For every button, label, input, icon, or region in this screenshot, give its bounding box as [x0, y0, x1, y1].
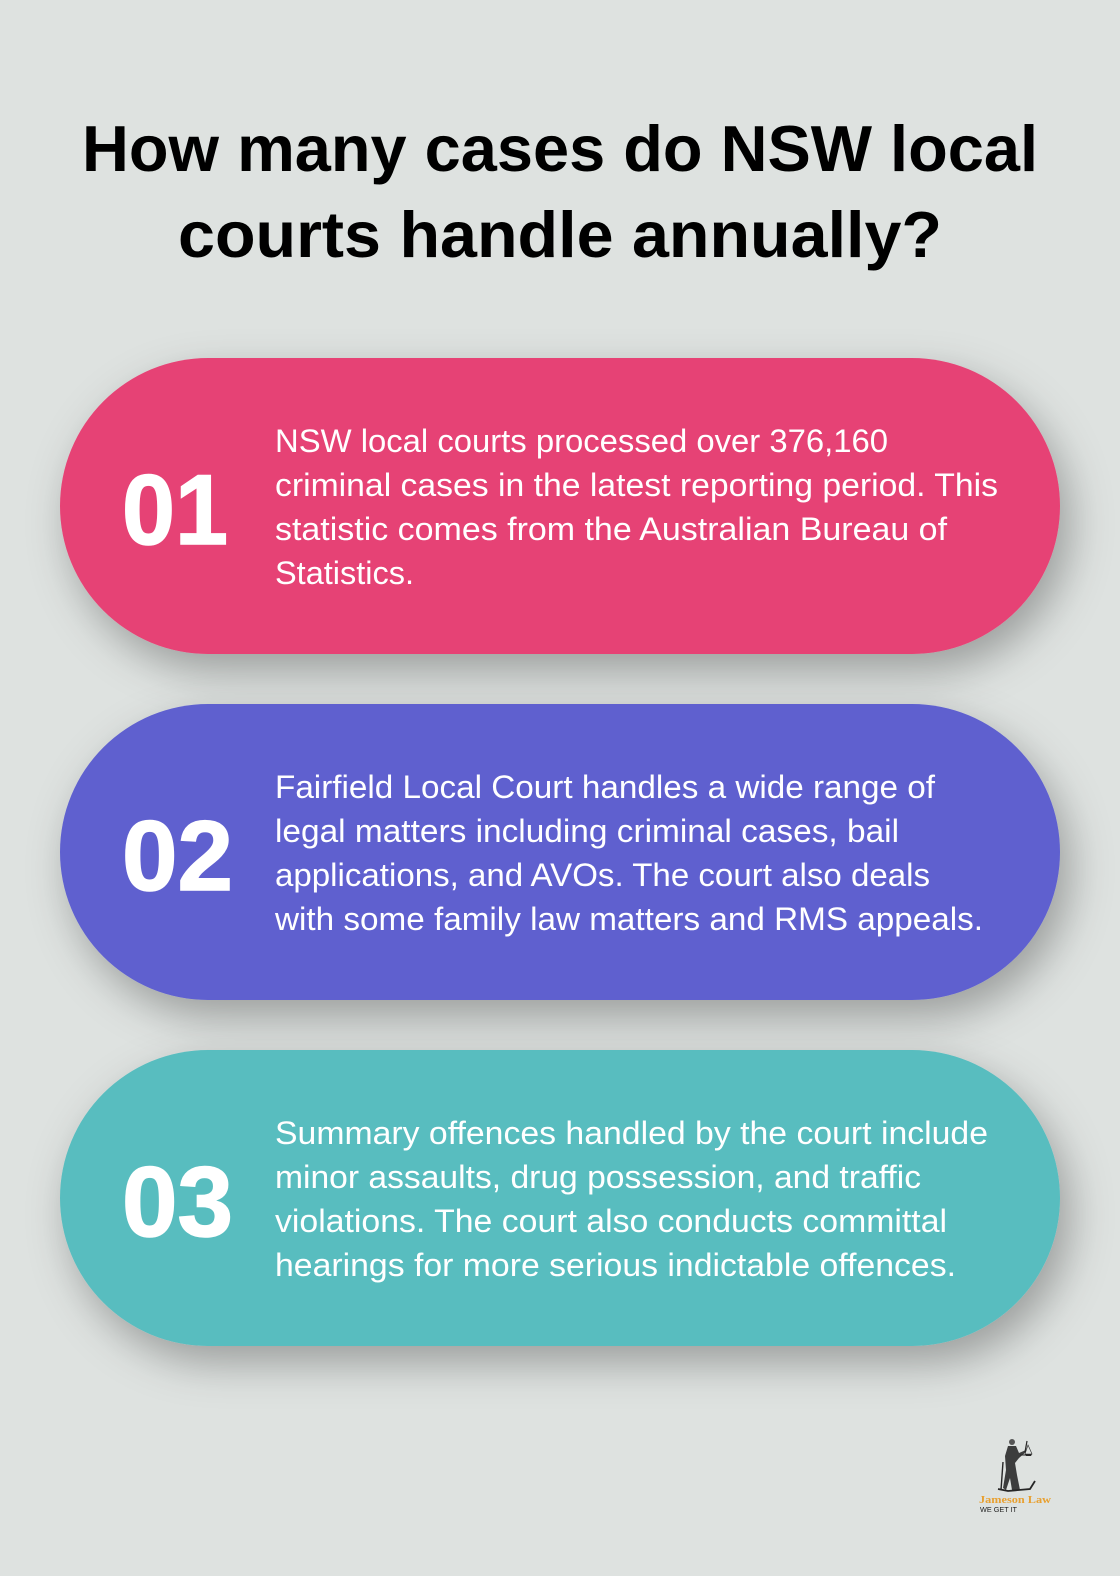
card 03 number: 03 [122, 1146, 233, 1257]
logo tagline: WE GET IT [980, 1507, 1018, 1514]
card 02 text [274, 769, 983, 937]
title [82, 112, 1038, 271]
card 01 text: criminal cases in the latest reporting period. This [275, 467, 998, 503]
card 02 text: applications, and AVOs. The court also deals [275, 857, 930, 893]
panel: card 01 [60, 358, 1060, 654]
card 01 text: Statistics. [275, 555, 414, 591]
card 02 text: with some family law matters and RMS appeals. [274, 901, 983, 937]
card 03 text [275, 1115, 988, 1283]
card 02 text: legal matters including criminal cases, bail [275, 813, 899, 849]
icon: lady justice with scales [998, 1439, 1035, 1491]
card 03 pill [60, 1050, 1060, 1346]
card 03 text: hearings for more serious indictable offences. [275, 1247, 956, 1283]
panel: card 02 [60, 704, 1060, 1000]
card 01 text: NSW local courts processed over 376,160 [275, 423, 888, 459]
card 03 text: violations. The court also conducts committal [275, 1203, 947, 1239]
card 03 text: minor assaults, drug possession, and traffic [275, 1159, 921, 1195]
card 02 number: 02 [122, 800, 233, 911]
card 01 number: 01 [122, 454, 228, 565]
title: courts handle annually? [178, 198, 942, 271]
card 03 text: Summary offences handled by the court include [275, 1115, 988, 1151]
card 02 text: Fairfield Local Court handles a wide range of [275, 769, 935, 805]
card 02 pill [60, 704, 1060, 1000]
logo: Jameson Law [979, 1439, 1051, 1514]
card 01 text [275, 423, 998, 591]
card 01 pill [60, 358, 1060, 654]
card 01 text: statistic comes from the Australian Bureau of [275, 511, 947, 547]
title: How many cases do NSW local [82, 112, 1038, 185]
logo name: Jameson Law [979, 1495, 1051, 1506]
panel: card 03 [60, 1050, 1060, 1346]
